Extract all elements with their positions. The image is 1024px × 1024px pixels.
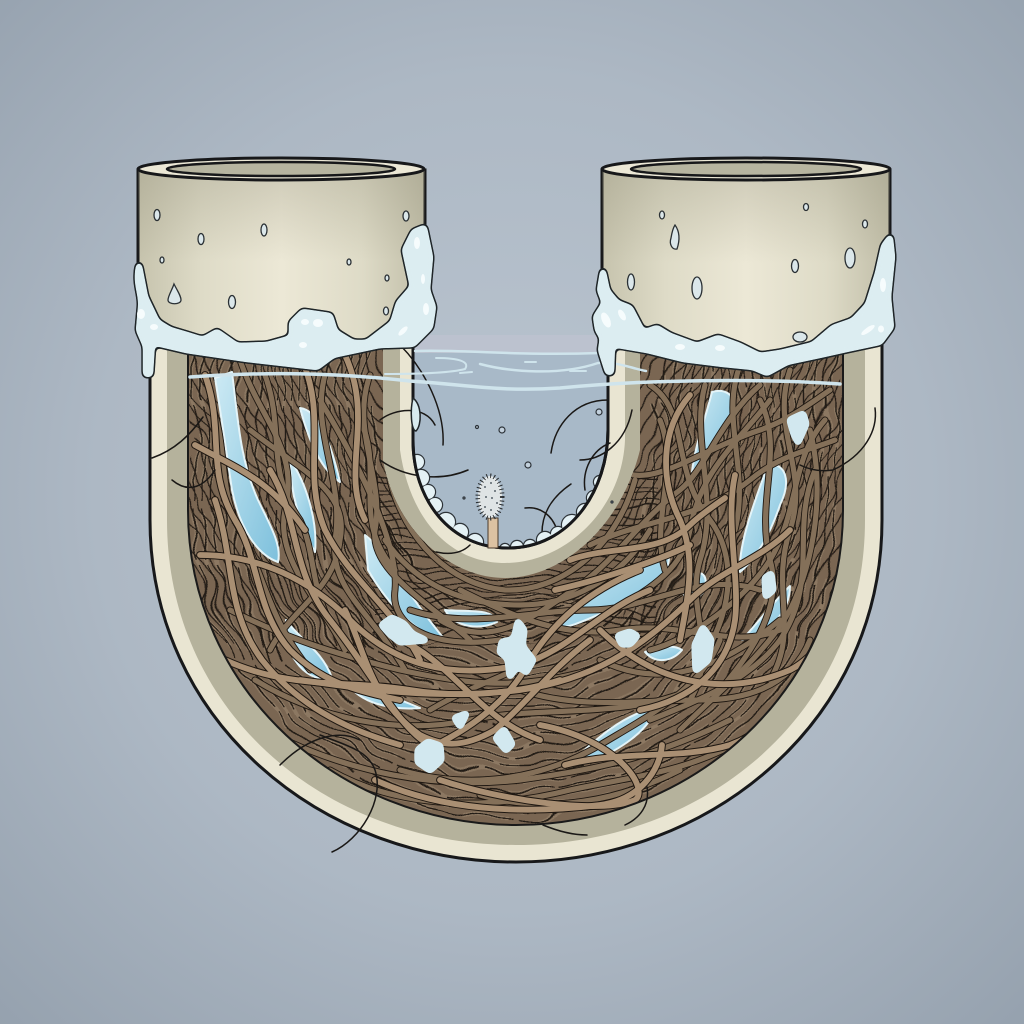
foam band bbox=[596, 238, 892, 373]
clog outline bbox=[188, 345, 843, 825]
icon: small brush on the channel floor bbox=[478, 476, 502, 548]
foam at inner bend of the channel bbox=[415, 454, 599, 546]
fibrous base layer bbox=[188, 340, 845, 818]
panel: hair clog mass bbox=[180, 340, 850, 830]
rim bbox=[602, 158, 890, 180]
blue water streaks in the clog bbox=[215, 372, 790, 765]
panel: water channel between the legs bbox=[405, 335, 617, 558]
channel wall outline bbox=[413, 345, 608, 548]
droplets bbox=[628, 204, 868, 342]
droplets bbox=[154, 210, 409, 315]
panel: left collar bbox=[137, 158, 433, 374]
water surface lines bbox=[190, 351, 840, 389]
panel: right collar bbox=[596, 158, 892, 373]
collar body bbox=[602, 170, 890, 356]
panel: U pipe body bbox=[150, 335, 882, 862]
foam band bbox=[137, 228, 433, 374]
foam clumps caught in the hair bbox=[382, 414, 806, 770]
foam drips beside the channel bbox=[411, 398, 420, 431]
rim bbox=[138, 158, 424, 180]
stray dark hairs bbox=[152, 345, 875, 852]
hair strands bbox=[210, 360, 835, 804]
collar body bbox=[138, 170, 425, 352]
small bubbles in water bbox=[463, 409, 613, 503]
